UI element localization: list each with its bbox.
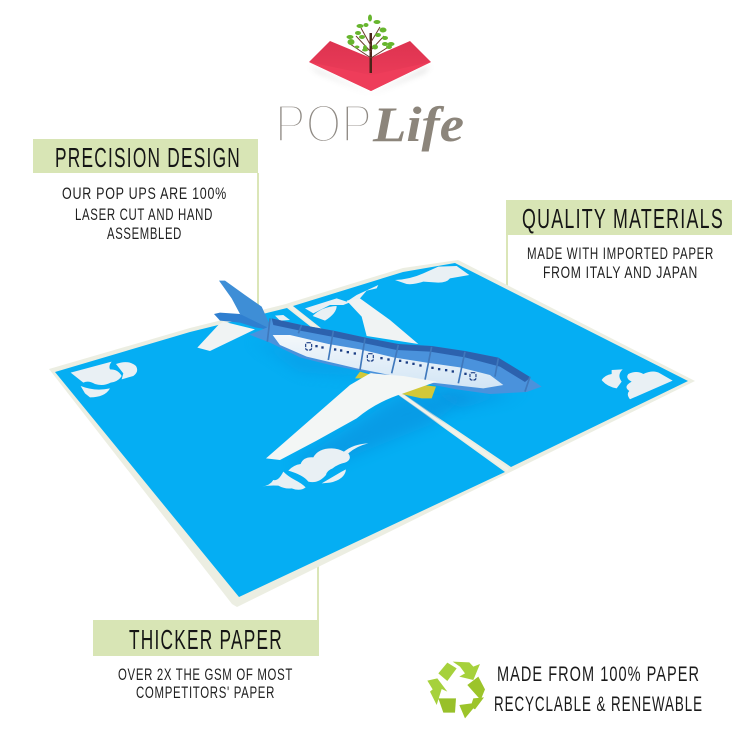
text: thicker paper description: OVER 2X THE GSM OF MOST — [118, 665, 293, 684]
callout: thicker paper — [93, 620, 319, 702]
icon: recycling arrows — [427, 662, 485, 718]
text: made from 100% paper — [494, 663, 703, 716]
text: precision design description: ASSEMBLED — [107, 224, 182, 243]
windows — [315, 345, 467, 375]
text: thicker paper description — [118, 665, 293, 702]
back wing — [347, 298, 418, 344]
clouds: top right and near fold — [275, 266, 469, 321]
pop-up card — [49, 260, 695, 607]
heading: thicker paper: THICKER PAPER — [129, 624, 283, 655]
text: precision design description — [62, 184, 227, 243]
front wing — [266, 373, 437, 460]
fuselage — [249, 318, 542, 394]
heading: precision design: PRECISION DESIGN — [55, 142, 241, 173]
clouds: left corner — [71, 362, 137, 397]
text: quality materials description — [527, 244, 714, 282]
fuselage dark roof band — [272, 318, 531, 382]
fuselage white side panels — [273, 335, 503, 388]
clouds: bottom centre — [262, 443, 368, 490]
card left panel — [55, 308, 505, 597]
logo wordmark POP: POP — [275, 94, 372, 154]
callout leader lines — [257, 173, 508, 621]
tail fin — [219, 281, 270, 327]
logo: Pop Life — [275, 14, 464, 154]
logo wordmark Life: Life — [372, 96, 464, 152]
horizontal stabiliser — [214, 313, 270, 330]
white stabiliser — [197, 322, 255, 351]
fuselage ribs — [267, 318, 530, 392]
logo icon: open red book with tree — [309, 14, 431, 94]
callout: quality materials — [506, 200, 732, 282]
doors — [306, 343, 476, 380]
yellow stand — [355, 372, 436, 398]
card right panel — [293, 263, 688, 467]
plane shadows on card — [250, 340, 540, 465]
clouds: right corner — [602, 369, 673, 399]
airplane — [197, 281, 542, 460]
text: precision design description: OUR POP UPS ARE 100% — [62, 184, 227, 203]
text: thicker paper description: COMPETITORS' PAPER — [136, 683, 275, 702]
card paper edge — [49, 260, 695, 607]
callout: precision design — [33, 139, 258, 243]
text: precision design description: LASER CUT AND HAND — [75, 205, 213, 224]
fold line — [290, 306, 508, 470]
